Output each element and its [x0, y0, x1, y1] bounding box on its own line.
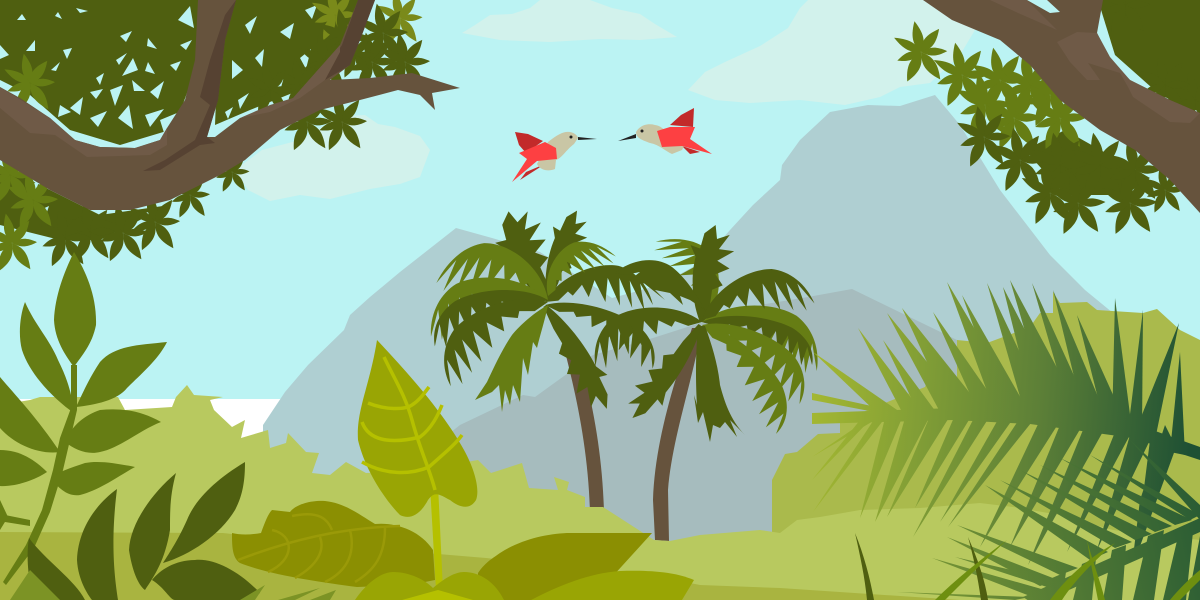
white horizon [0, 399, 300, 479]
hummingbird: right [618, 108, 712, 154]
palm frond: lower crossing frond [897, 440, 1200, 600]
palm tree: left [426, 201, 666, 418]
palm trunks [562, 328, 702, 541]
mountain: main range [263, 95, 1113, 560]
right bush [772, 292, 1200, 600]
foreground plant: dark leaves [28, 462, 260, 600]
large arrow leaf on stem [358, 340, 477, 590]
top-right canopy [892, 0, 1200, 236]
top-left canopy [0, 0, 430, 273]
palm frond: large spiked frond on the right [812, 280, 1200, 565]
bottom leaf cluster [355, 571, 694, 600]
top-right tree trunk [923, 0, 1200, 213]
ground: dark hill [0, 532, 960, 600]
hummingbird: left [512, 132, 597, 182]
ground: light bushes [0, 385, 1200, 600]
grass blades [855, 533, 1200, 600]
small grass at bottom [10, 570, 336, 600]
palm tree: right [588, 222, 826, 442]
clouds [235, 0, 975, 201]
olive leaf: left [232, 501, 435, 587]
sky gaps in canopy [0, 5, 317, 231]
olive leaf: right [478, 533, 652, 600]
top-left tree branches [0, 0, 460, 210]
mountain: far range [445, 289, 960, 560]
foreground plant: mid green stem and leaves [0, 252, 167, 585]
